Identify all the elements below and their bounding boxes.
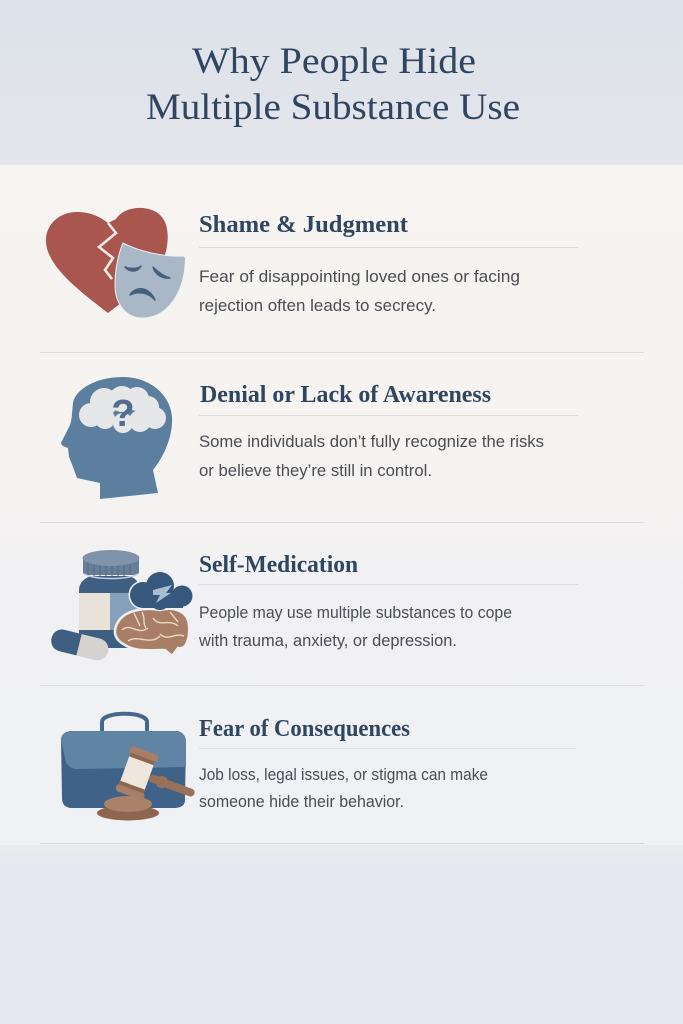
text block: someone hide their behavior.: [199, 792, 404, 811]
text block: People may use multiple substances to cope: [199, 603, 512, 622]
panel: shame and judgment: [46, 208, 578, 318]
title: [146, 41, 520, 128]
text block: Some individuals don’t fully recognize the risks: [199, 432, 544, 451]
text block: Fear of disappointing loved ones or facing: [199, 267, 520, 286]
title: Multiple Substance Use: [146, 87, 520, 128]
header band: [0, 0, 683, 165]
icon: broken heart and sad mask: [46, 208, 186, 318]
text block: with trauma, anxiety, or depression.: [198, 631, 457, 650]
icon: head with question cloud: [61, 377, 172, 499]
icon: briefcase and gavel: [61, 714, 203, 820]
rule: [199, 748, 576, 749]
text block: Job loss, legal issues, or stigma can make: [199, 765, 488, 784]
panel: denial or lack of awareness: [61, 377, 578, 499]
rule: [199, 415, 578, 416]
text block: [199, 765, 488, 811]
rule: [199, 247, 578, 248]
text block: [198, 603, 512, 650]
panel: fear of consequences: [61, 714, 576, 820]
heading: Fear of Consequences: [199, 716, 410, 742]
rule: [199, 584, 578, 585]
heading: Denial or Lack of Awareness: [200, 382, 491, 408]
heading: Self-Medication: [199, 552, 358, 578]
heading: Shame & Judgment: [199, 212, 408, 238]
icon: pill bottle, capsule, brain and storm cloud: [49, 550, 193, 663]
text block: rejection often leads to secrecy.: [199, 296, 436, 315]
panel: self-medication: [49, 550, 578, 663]
text block: [199, 432, 544, 480]
content panel background: [0, 165, 683, 845]
text block: [199, 267, 520, 315]
title: Why People Hide: [192, 41, 476, 82]
text block: or believe they’re still in control.: [199, 461, 432, 480]
icon: head with question cloud: ?: [111, 393, 135, 435]
